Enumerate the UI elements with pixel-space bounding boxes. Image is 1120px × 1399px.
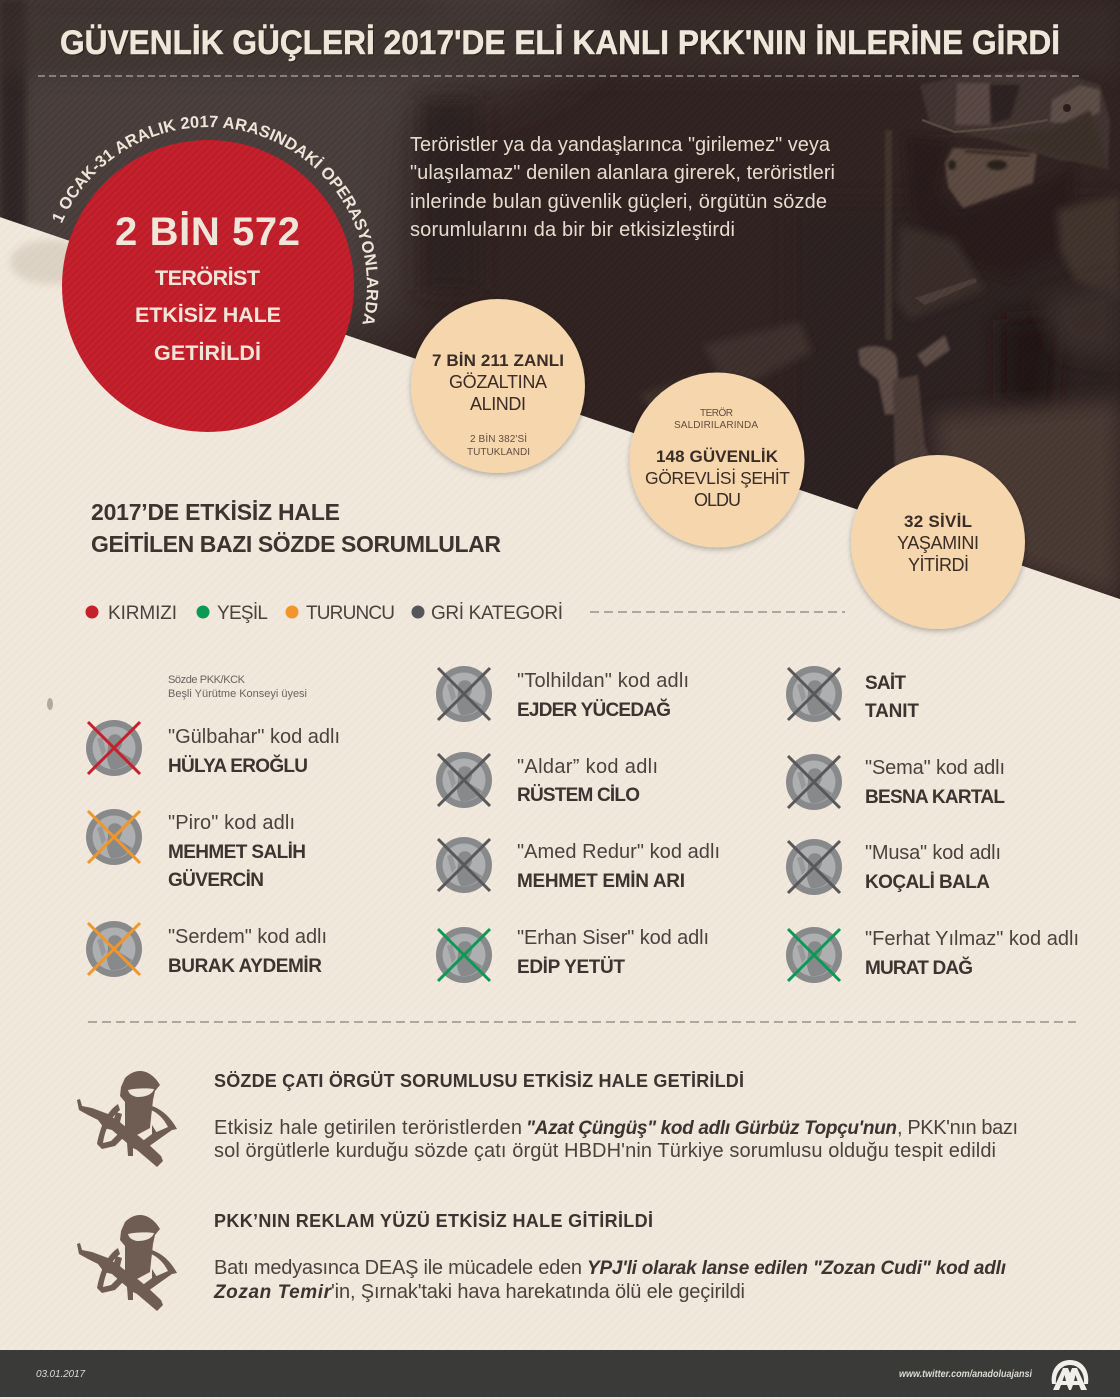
circle: security personnel killed [630, 372, 804, 548]
person: Hülya Eroğlu: "Gülbahar" kod adlı [168, 726, 340, 748]
background photo: soldier [0, 0, 1120, 620]
soldier face [945, 148, 1037, 208]
soldier helmet [920, 70, 1110, 165]
intro paragraph: inlerinde bulan güvenlik güçleri, örgütün sözde [410, 191, 827, 213]
person: Koçali Bala: KOÇALİ BALA [865, 872, 990, 893]
person: Sait Tanıt [786, 666, 919, 722]
circle: security personnel killed: SALDIRILARINDA [674, 420, 758, 431]
circle: civilians killed: 32 SİVİL [904, 512, 972, 531]
person: Ejder Yücedağ: "Tolhildan" kod adlı [517, 670, 689, 692]
footer bar: 03.01.2017 [36, 1369, 85, 1380]
person: Murat Dağ: "Ferhat Yılmaz" kod adlı [865, 928, 1079, 950]
circle: security personnel killed: 148 GÜVENLİK [656, 447, 779, 466]
circle: security personnel killed: TERÖR [700, 407, 733, 419]
person: Rüstem Cilo: "Aldar” kod adlı [517, 756, 658, 778]
person: Rüstem Cilo [436, 752, 658, 808]
circle: detained suspects: 7 BİN 211 ZANLI [432, 351, 564, 370]
person: Edip Yetüt [436, 927, 709, 983]
story: umbrella organisation head [214, 1071, 1018, 1162]
person: Hülya Eroğlu [86, 720, 340, 777]
story: PKK's advertising face: Batı medyasınca DEAŞ ile mücadele eden [214, 1257, 582, 1279]
circle: security personnel killed: GÖREVLİSİ ŞEHİT [645, 468, 790, 488]
person: Besna Kartal: BESNA KARTAL [865, 787, 1005, 808]
story: umbrella organisation head: SÖZDE ÇATI ÖRGÜT SORUMLUSU ETKİSİZ HALE GETİRİLDİ [214, 1071, 744, 1091]
legend [86, 603, 563, 624]
circle: detained suspects: GÖZALTINA [449, 372, 547, 392]
person: Besna Kartal: "Sema" kod adlı [865, 757, 1005, 779]
story: PKK's advertising face: 'in, Şırnak'taki hava harekatında ölü ele geçirildi [331, 1281, 745, 1303]
icon: Anadolu Agency logo [1052, 1360, 1088, 1390]
person: Besna Kartal [786, 754, 1005, 810]
story: PKK's advertising face: PKK’NIN REKLAM YÜZÜ ETKİSİZ HALE GİTİRİLDİ [214, 1211, 653, 1231]
note: executive council: Beşli Yürütme Konseyi üyesi [168, 688, 307, 700]
footer bar: www.twitter.com/anadoluajansi [899, 1369, 1032, 1380]
section heading: GEİTİLEN BAZI SÖZDE SORUMLULAR [91, 531, 501, 557]
red circle: 2 bin 572 terrorists neutralised: 2 BİN 572 [115, 210, 300, 254]
person: Edip Yetüt: "Erhan Siser" kod adlı [517, 927, 709, 949]
intro paragraph: sorumlularını da bir bir etkisizleştirdi [410, 219, 735, 241]
circle: security personnel killed: OLDU [694, 490, 741, 510]
circle: detained suspects: ALINDI [470, 394, 526, 414]
circle: detained suspects: 2 BİN 382'Sİ [470, 432, 527, 445]
person: Sait Tanıt: SAİT [865, 673, 906, 694]
person: Ejder Yücedağ: EJDER YÜCEDAĞ [517, 699, 671, 721]
footer bar [0, 1350, 1120, 1397]
soldier balaclava [908, 138, 1071, 212]
red circle: 2 bin 572 terrorists neutralised: 1 OCAK-31 ARALIK 2017 ARASINDAKİ OPERASYONLARDA [52, 116, 378, 324]
section heading [91, 499, 501, 557]
legend: GRİ KATEGORİ [431, 603, 563, 624]
circle: detained suspects: TUTUKLANDI [467, 447, 530, 458]
story: PKK's advertising face: YPJ'li olarak lanse edilen "Zozan Cudi" kod adlı [587, 1258, 1006, 1279]
person: Burak Aydemir [86, 921, 327, 977]
person: Burak Aydemir: "Serdem" kod adlı [168, 926, 327, 948]
story: umbrella organisation head: sol örgütlerle kurduğu sözde çatı örgüt HBDH'nin Türkiye sorumlusu olduğu tespit edildi [214, 1140, 996, 1162]
story: umbrella organisation head: Etkisiz hale getirilen teröristlerden [214, 1117, 522, 1139]
note: executive council [168, 674, 307, 700]
red circle: 2 bin 572 terrorists neutralised [52, 116, 378, 432]
legend: KIRMIZI [108, 603, 177, 624]
person: Koçali Bala [786, 839, 1001, 895]
circle: civilians killed [851, 455, 1025, 629]
legend: TURUNCU [306, 603, 395, 624]
person: Mehmet Emin Arı [436, 837, 720, 893]
person: Mehmet Emin Arı: "Amed Redur" kod adlı [517, 841, 720, 863]
title: GÜVENLİK GÜÇLERİ 2017'DE ELİ KANLI PKK'NIN İNLERİNE GİRDİ [60, 24, 1060, 62]
person: Rüstem Cilo: RÜSTEM CİLO [517, 785, 640, 806]
person: Burak Aydemir: BURAK AYDEMİR [168, 956, 322, 977]
person: Murat Dağ [786, 927, 1079, 983]
intro paragraph: Teröristler ya da yandaşlarınca "girilemez" veya [410, 134, 831, 156]
person: Hülya Eroğlu: HÜLYA EROĞLU [168, 755, 308, 777]
section heading: 2017’DE ETKİSİZ HALE [91, 499, 340, 525]
circle: civilians killed: YİTİRDİ [908, 555, 969, 575]
person: Mehmet Salih Güvercin: "Piro" kod adlı [168, 812, 295, 834]
person: Koçali Bala: "Musa" kod adlı [865, 842, 1001, 864]
story: PKK's advertising face: Zozan Temir [213, 1282, 333, 1303]
icon: militant 2 [77, 1215, 177, 1311]
person: Murat Dağ: MURAT DAĞ [865, 957, 973, 979]
story: umbrella organisation head: "Azat Çüngüş" kod adlı Gürbüz Topçu'nun [526, 1118, 897, 1139]
person: Ejder Yücedağ [436, 666, 689, 722]
icon: militant 1 [77, 1071, 177, 1167]
person: Edip Yetüt: EDİP YETÜT [517, 957, 625, 978]
red circle: 2 bin 572 terrorists neutralised: GETİRİLDİ [154, 341, 261, 365]
person: Mehmet Salih Güvercin [86, 809, 306, 891]
person: Mehmet Emin Arı: MEHMET EMİN ARI [517, 871, 685, 892]
red circle: 2 bin 572 terrorists neutralised: TERÖRİST [155, 265, 260, 290]
story: PKK's advertising face [213, 1211, 1006, 1303]
person: Mehmet Salih Güvercin: MEHMET SALİH [168, 842, 306, 863]
note: executive council: Sözde PKK/KCK [168, 674, 246, 686]
red circle: 2 bin 572 terrorists neutralised: ETKİSİZ HALE [135, 303, 281, 327]
circle: civilians killed: YAŞAMINI [897, 533, 979, 553]
intro paragraph: "ulaşılamaz" denilen alanlara girerek, teröristleri [410, 162, 835, 184]
intro paragraph [410, 134, 835, 241]
story: umbrella organisation head: , PKK'nın bazı [897, 1117, 1018, 1139]
person: Mehmet Salih Güvercin: GÜVERCİN [168, 870, 264, 891]
legend: YEŞİL [217, 603, 268, 624]
circle: detained suspects [411, 299, 585, 473]
person: Sait Tanıt: TANIT [865, 701, 919, 722]
soldier body [1057, 195, 1120, 300]
